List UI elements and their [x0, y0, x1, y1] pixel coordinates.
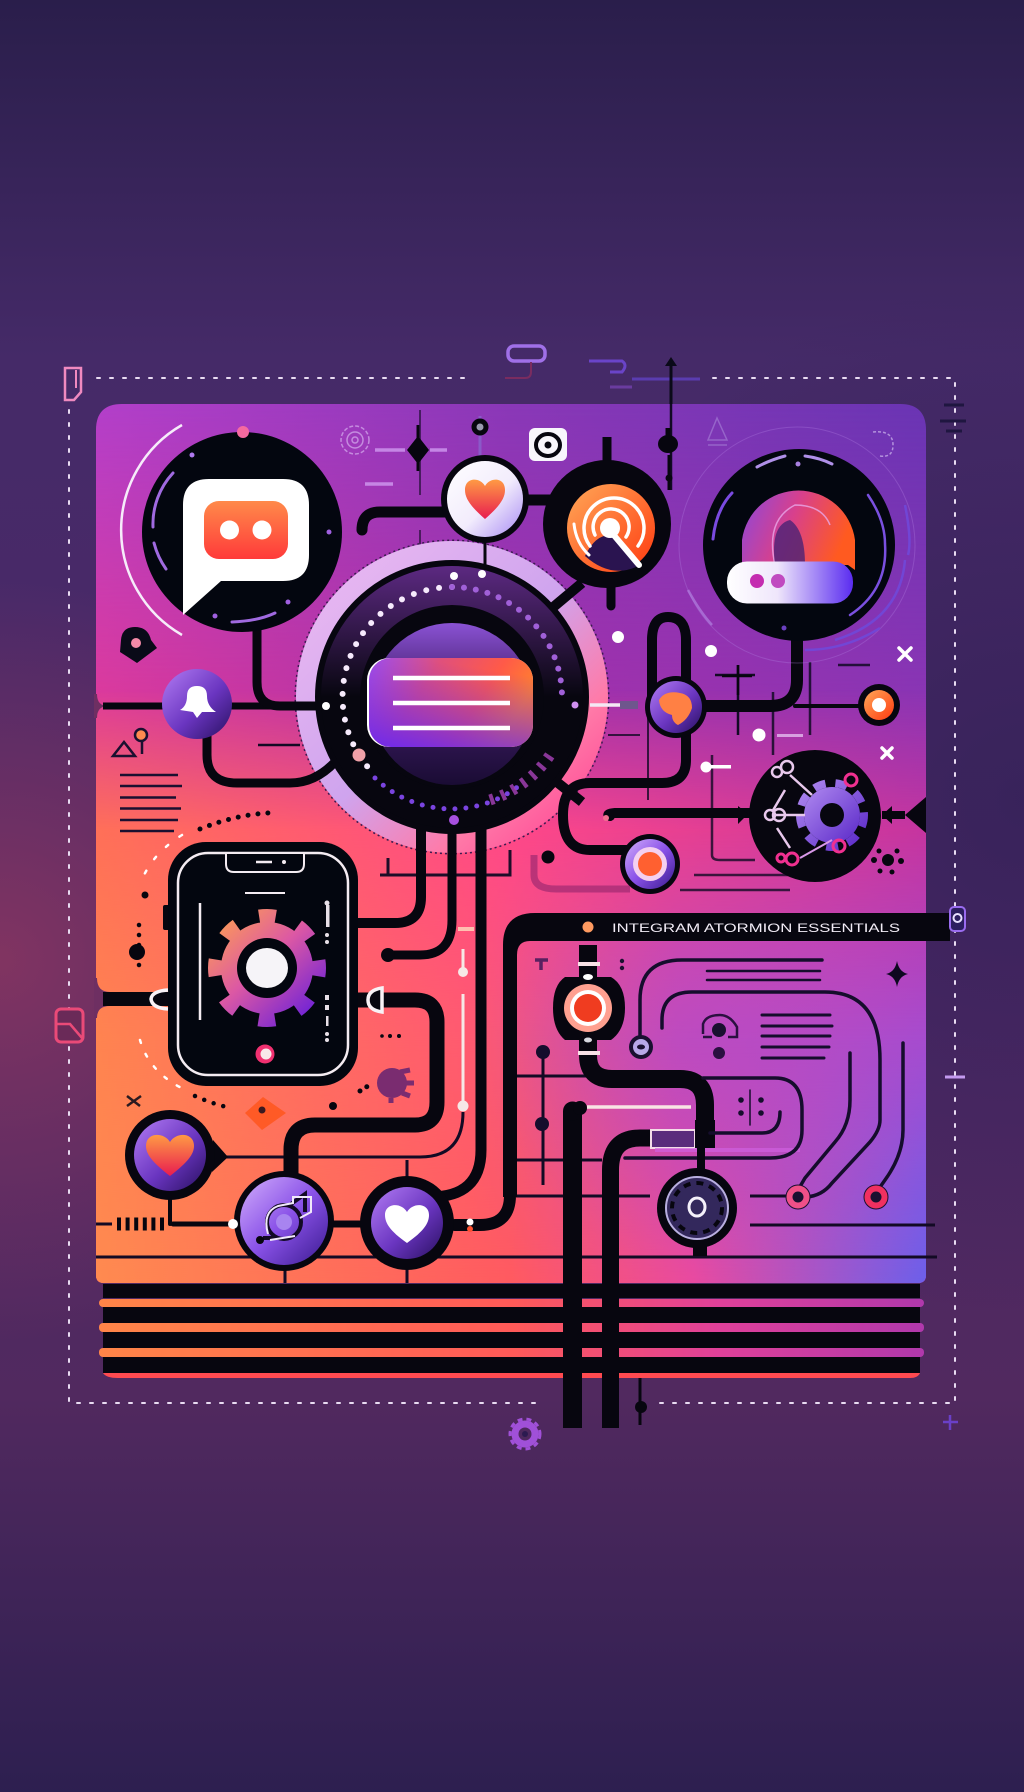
- icon: heart: [465, 480, 505, 519]
- center hub: [318, 563, 638, 831]
- bell circle: [162, 669, 232, 739]
- thick connectors: [103, 437, 905, 1225]
- icon: small t mark: [535, 959, 624, 970]
- icon: bell: [180, 686, 216, 718]
- white heart circle: [360, 1176, 454, 1270]
- ghost u shape: [534, 855, 630, 889]
- red gear node: [553, 964, 625, 1053]
- panel edge notches: [94, 694, 112, 1018]
- icon: dome: [742, 491, 855, 570]
- icon: gear: [800, 783, 864, 847]
- icon: small spark: [127, 1096, 141, 1106]
- small top circle: [472, 418, 488, 436]
- heart circle: [441, 455, 529, 565]
- icon: diamond black: [658, 428, 678, 490]
- small dots right of phone: [380, 948, 401, 1038]
- camera circle: [228, 1171, 334, 1271]
- message card: [367, 658, 533, 747]
- icon: orange ring node: [858, 684, 900, 726]
- text lines left: [120, 775, 182, 831]
- icon: diamond node: [407, 425, 429, 471]
- icon: triangle and pin: [113, 729, 147, 756]
- target circle: [543, 460, 671, 588]
- dotted frame: [69, 378, 955, 1403]
- icon: pill: [727, 562, 853, 604]
- icon: question pin: [703, 1015, 737, 1059]
- phone clips: [151, 988, 382, 1012]
- icon: pin marker: [120, 627, 157, 663]
- right curved lines: [625, 960, 903, 1197]
- icon: heart: [385, 1205, 429, 1243]
- icon: dot cluster: [871, 848, 904, 874]
- dotted ring right: [452, 587, 562, 697]
- decorative icons outside panel: [56, 346, 966, 1449]
- thin circuit lines: [96, 404, 937, 1283]
- network gear circle: [738, 750, 926, 882]
- phone: [163, 842, 358, 1086]
- icon: orange diamond: [245, 1097, 286, 1130]
- white sparks: [612, 631, 911, 772]
- tick marks: [490, 755, 550, 800]
- header bar: [503, 913, 950, 1197]
- icon: header badge: [950, 907, 965, 931]
- main panel: [96, 404, 926, 1283]
- icon: white vertical sliders: [458, 929, 474, 1112]
- lens gear node: [657, 1148, 737, 1256]
- purple heart node: [645, 676, 707, 738]
- icon: gear: [217, 918, 317, 1018]
- dots left column: [535, 1045, 550, 1131]
- pink nodes: [786, 1185, 888, 1209]
- icon: orange message: [204, 501, 288, 559]
- bottom stripes: [99, 1284, 924, 1378]
- icon: faint triangle: [708, 418, 893, 456]
- dotted ring bottom: [375, 778, 520, 809]
- icon: top swirl: [341, 426, 447, 484]
- heading: INTEGRAM ATORMION ESSENTIALS: [612, 921, 900, 935]
- big bubble circle: [679, 427, 915, 663]
- icon: dot grid: [738, 1097, 764, 1116]
- dotted orbit around phone: [129, 813, 368, 1110]
- icon: home button: [256, 1044, 274, 1064]
- icon: speech bubble: [183, 479, 309, 615]
- icon: purple gear blob: [377, 1068, 414, 1103]
- icon: instagram square: [529, 428, 567, 461]
- heart circle left: [125, 1110, 228, 1200]
- icon: white line and box: [587, 1107, 800, 1150]
- icon: star: [886, 961, 908, 987]
- chat circle: [121, 425, 342, 635]
- connector dots: [466, 1218, 474, 1232]
- long black vertical bars: [563, 1101, 696, 1428]
- outer ring decoration: [296, 541, 608, 853]
- icon: link: [263, 1194, 305, 1239]
- icon: cross star: [722, 665, 752, 695]
- ring node lower: [620, 834, 680, 894]
- dome: [371, 623, 533, 785]
- icon: heart: [146, 1135, 194, 1176]
- dotted ring left: [343, 587, 452, 775]
- small dots middle: [542, 815, 609, 864]
- ring node small: [629, 1035, 653, 1059]
